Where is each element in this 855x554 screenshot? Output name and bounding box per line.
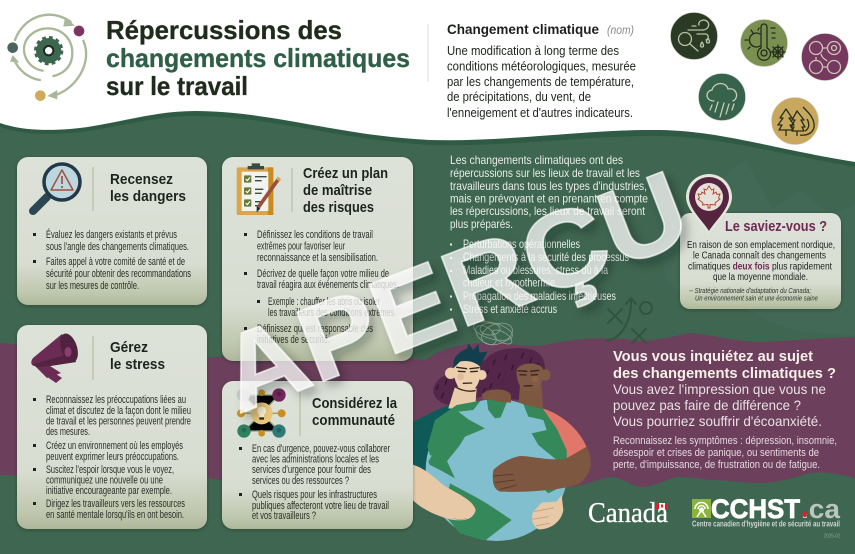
definition: changement climatique: Changement climatique	[447, 21, 599, 37]
logo: CCHST: CCHST	[711, 494, 800, 524]
text block: écoanxiété: Vous vous inquiétez au sujet	[613, 348, 813, 365]
icon: community network	[237, 388, 286, 438]
man's neck and face	[448, 387, 477, 410]
bullet list: avec les administrations locales et les	[252, 454, 379, 466]
bullet list: climat et discutez de la façon dont le milieu	[46, 405, 191, 417]
bullet list: publiques affecteront votre lieu de travail	[252, 500, 389, 512]
bullet list: peuvent exprimer leurs préoccupations.	[46, 451, 179, 463]
illustration: two people holding the Earth	[407, 343, 591, 541]
bullet list: Décrivez de quelle façon votre milieu de	[257, 268, 389, 280]
heading: Recensez	[110, 171, 173, 188]
bullet list: Évaluez les dangers existants et prévus	[46, 228, 177, 241]
fact text: que la moyenne mondiale.	[713, 272, 808, 283]
fact text: le Canada connaît des changements	[693, 250, 826, 262]
text block: écoanxiété: des changements climatiques ?	[613, 365, 836, 382]
text block: introduction and impacts list	[450, 153, 648, 316]
bullet list: sous l'angle des changements climatiques.	[46, 241, 189, 253]
heading	[110, 171, 186, 205]
heading	[312, 395, 398, 429]
text block: introduction and impacts list: travailleurs dans tous les types d'industries,	[450, 179, 647, 193]
bullet list: initiative encourageante par exemple.	[46, 485, 172, 497]
heading: des risques	[303, 199, 374, 216]
bullet list: travail réagira aux événements climatiques.	[257, 279, 399, 291]
fact text: -- Stratégie nationale d'adaptation du Canada;	[689, 288, 811, 295]
definition: changement climatique	[447, 21, 636, 120]
watermark: APERÇU: APERÇU	[203, 147, 704, 435]
heading: Gérez	[110, 339, 148, 356]
title	[106, 15, 410, 101]
bullet list: sécurité pour obtenir des recommandations	[46, 268, 191, 280]
icon: chalk play diagram	[607, 298, 652, 343]
bullet list	[33, 394, 191, 521]
definition: changement climatique: par les changements de température,	[447, 75, 634, 89]
icon: magnifier with warning	[33, 164, 80, 211]
definition: changement climatique: l'enneigement et d'autres indicateurs.	[447, 106, 633, 120]
text block: introduction and impacts list: mais en prévoyant et en prenant en compte	[450, 192, 648, 206]
text block: écoanxiété: Vous pourriez souffrir d'écoanxiété.	[613, 413, 822, 429]
globe continents	[427, 399, 567, 541]
purple wave band	[0, 333, 855, 491]
panel: considérez la communauté	[222, 381, 413, 529]
bullet list: des mesures.	[46, 426, 90, 438]
bullet list: Définissez les conditions de travail	[257, 229, 373, 241]
panel: gérez le stress	[17, 325, 207, 529]
bullet list: les travailleurs des conditions extrêmes.	[268, 307, 396, 319]
text block: introduction and impacts list: répercussions sur les lieux de travail et les	[450, 166, 640, 180]
heading: communauté	[312, 412, 395, 429]
logo: CCHST: 2025-02	[824, 534, 840, 540]
bullet list: Créez un environnement où les employés	[46, 440, 183, 452]
definition: changement climatique: Une modification à long terme des	[447, 44, 619, 58]
bullet list: sur les mesures de contrôle.	[46, 280, 139, 292]
text block: écoanxiété: perte, d'impuissance, de frustration ou de fatigue.	[613, 459, 820, 471]
heading: Créez un plan	[303, 165, 388, 182]
text block: écoanxiété: Vous avez l'impression que vous ne	[613, 381, 826, 397]
icon: tangled scribble	[472, 318, 515, 349]
icon: map pin with maple leaf	[686, 174, 732, 234]
man's teal shirt	[407, 404, 473, 473]
icon: gear with climate cycle arrows	[7, 15, 86, 101]
bullet list: Définissez qui est responsable des	[257, 323, 373, 335]
text block: introduction and impacts list: Propagation des maladies infectieuses	[463, 289, 616, 303]
bullet list: Faites appel à votre comité de santé et de	[46, 256, 185, 268]
definition: changement climatique: (nom)	[607, 23, 634, 37]
bullet list: en santé mentale lorsqu'ils en ont besoin.	[46, 509, 184, 521]
definition: changement climatique: de précipitations, du vent, de	[447, 90, 591, 104]
bullet list: et vos travailleurs ?	[252, 510, 316, 522]
bullet list	[33, 228, 191, 292]
logo: CCHST: .ca	[801, 494, 841, 524]
woman's hand on top of globe	[482, 389, 511, 403]
logo: CCHST	[692, 494, 841, 540]
heading: Considérez la	[312, 395, 398, 412]
bullet list: Dirigez les travailleurs vers les ressources	[46, 498, 185, 510]
icon: thermometer badge	[740, 20, 788, 66]
fact text	[687, 240, 835, 302]
definition: changement climatique: conditions météorologiques, mesurée	[447, 60, 636, 74]
text block: introduction and impacts list: Changements à la sécurité des processus	[463, 250, 629, 264]
bullet list: Exemple : chauffer les abris ou isoler	[268, 296, 380, 308]
globe	[426, 399, 568, 541]
title: sur le travail	[106, 71, 248, 101]
bullet list: communiquez une nouvelle ou une	[46, 474, 163, 486]
title: changements climatiques	[106, 43, 410, 73]
man's arm and hands	[407, 463, 476, 520]
icon: forest fire badge	[772, 98, 818, 144]
heading	[303, 165, 388, 216]
text block: introduction and impacts list: chaleur et hypothermie	[463, 276, 555, 290]
bullet list: En cas d'urgence, pouvez-vous collaborer	[252, 443, 390, 455]
panel: le saviez-vous	[680, 174, 841, 309]
woman's coral shirt	[538, 407, 587, 458]
fact text: Un environnement sain et une économie saine	[695, 296, 818, 302]
icon: megaphone	[31, 331, 81, 383]
bullet list: Suscitez l'espoir lorsque vous le voyez,	[46, 464, 174, 476]
bullet list	[239, 443, 390, 522]
fact text: climatiques deux fois plus rapidement	[688, 262, 832, 272]
woman's curly hair	[433, 348, 545, 405]
heading	[110, 339, 165, 373]
text block: introduction and impacts list: Maladies ou blessures, stress dû à la	[463, 263, 608, 277]
icon: connected systems badge	[802, 34, 848, 80]
bullet list: services ou des ressources ?	[252, 475, 349, 487]
logo: Canada wordmark: Canada	[588, 498, 669, 529]
panel: plan de maîtrise des risques	[222, 157, 413, 361]
text block: introduction and impacts list: Les changements climatiques ont des	[450, 153, 623, 167]
heading: Le saviez-vous ?	[725, 219, 827, 235]
text block: introduction and impacts list: les répercussions, les lieux de travail seront	[450, 204, 646, 218]
bullet list	[244, 229, 399, 346]
woman's arm around globe	[493, 447, 591, 492]
bullet list: initiatives de sécurité.	[257, 334, 330, 346]
bullet list: Quels risques pour les infrastructures	[252, 489, 377, 501]
bullet list: de travail et les personnes peuvent prendre	[46, 416, 191, 428]
text block: introduction and impacts list: Stress et anxiété accrus	[463, 302, 557, 316]
text block: introduction and impacts list: Perturbations opérationnelles	[463, 237, 580, 251]
panel: recensez les dangers	[17, 157, 207, 305]
icon: rain cloud badge	[698, 74, 746, 120]
man's spiky hair	[453, 343, 487, 368]
faint map of Canada	[660, 160, 855, 335]
bullet list: Reconnaissez les préoccupations liées au	[46, 394, 186, 406]
text block: écoanxiété	[613, 348, 837, 471]
title: Répercussions des	[106, 15, 342, 45]
woman's neck and face	[518, 385, 543, 412]
text block: écoanxiété: pouvez pas faire de différence ?	[613, 397, 801, 413]
bullet list: reconnaissance et la sensibilisation.	[257, 252, 378, 264]
bullet list: extrêmes pour favoriser leur	[257, 240, 345, 252]
heading: les dangers	[110, 188, 186, 205]
icon: clipboard and pencil	[237, 163, 281, 215]
bullet list: services d'urgence pour fournir des	[252, 464, 371, 476]
icon: wind and magnifier badge	[670, 12, 718, 60]
heading: de maîtrise	[303, 182, 372, 199]
heading: le stress	[110, 356, 165, 373]
text block: écoanxiété: désespoir et crises de panique, ou sentiments de	[613, 447, 819, 459]
text block: introduction and impacts list: plus préparés.	[450, 217, 513, 231]
